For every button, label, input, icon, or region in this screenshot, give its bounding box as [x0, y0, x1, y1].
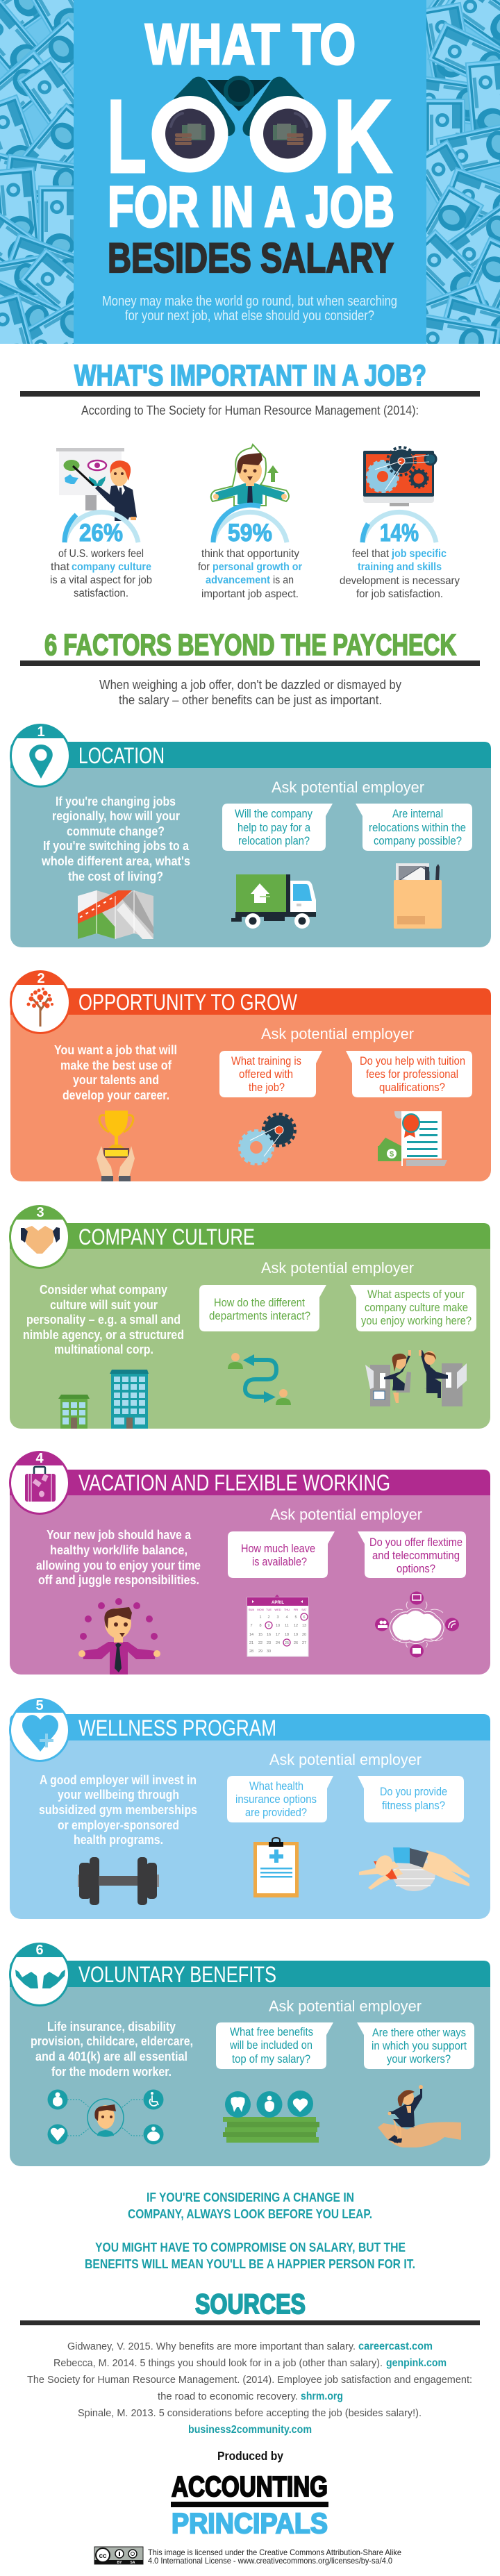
description: subsidized gym memberships: [39, 1803, 197, 1817]
factors intro: the salary – other benefits can be just as important.: [119, 693, 382, 707]
bubble: question 1: What free benefits: [230, 2025, 313, 2038]
icon: calendar: 17: [276, 1633, 280, 1637]
bubble: question 2: options?: [397, 1562, 435, 1575]
description: Consider what company: [40, 1283, 167, 1297]
title word: look: O: [152, 77, 228, 194]
icon: presenter at board: [56, 448, 137, 521]
badge: 4 suitcase: [9, 1451, 70, 1515]
description: [39, 1773, 197, 1847]
badge: 1 location pin: 1: [37, 724, 45, 740]
money background: [0, 0, 500, 344]
panel: wellness program: [9, 1698, 490, 1919]
logo: accounting principals: PRINCIPALS: [172, 2507, 328, 2539]
panel: vacation and flexible working: [9, 1451, 490, 1675]
creative commons badge: cc: [99, 2552, 107, 2560]
badge: 3 handshake: 3: [36, 1205, 44, 1220]
panel: company culture: [9, 1205, 490, 1429]
icon: calendar: 25: [285, 1641, 289, 1645]
icon: calendar: 3: [276, 1615, 279, 1620]
icon: calendar: TUE: [266, 1608, 272, 1611]
source intro: According to The Society for Human Resource Management (2014):: [81, 404, 419, 417]
title word: look: K: [333, 78, 392, 194]
bubble: question 1: departments interact?: [209, 1309, 310, 1322]
description: your talents and: [73, 1073, 159, 1087]
bubble: question 2: What aspects of your: [367, 1288, 465, 1301]
bubble: question 1: the job?: [249, 1081, 285, 1094]
badge: 1 location pin: [10, 724, 71, 788]
bubble: question 1: [199, 1285, 326, 1331]
closing message: BENEFITS WILL MEAN YOU'LL BE A HAPPIER PERSON FOR IT.: [85, 2257, 415, 2271]
sources list: Rebecca, M. 2014. 5 things you should look for in a job (other than salary).: [53, 2357, 383, 2369]
description: off and juggle responsibilities.: [38, 1573, 199, 1587]
sources list: [27, 2341, 472, 2436]
icon: calendar: 23: [267, 1641, 271, 1645]
panel title: WELLNESS PROGRAM: [78, 1715, 276, 1740]
stat text: [50, 548, 152, 599]
stat text: is an: [273, 574, 294, 586]
panel title: COMPANY CULTURE: [78, 1224, 255, 1249]
sources list: the road to economic recovery.: [158, 2391, 298, 2402]
icon: trophy in hands: [97, 1111, 135, 1181]
description: the cost of living?: [68, 870, 163, 883]
ask heading: Ask potential employer: [272, 779, 424, 796]
icon: juggling man: [78, 1598, 160, 1675]
description: develop your career.: [62, 1088, 169, 1102]
description: personality – e.g. a small and: [26, 1313, 181, 1327]
license text: This image is licensed under the Creative Commons Attribution-Share Alike: [148, 2548, 401, 2557]
bubble: question 2: Do you offer flextime: [369, 1536, 462, 1549]
creative commons badge: BY: [117, 2561, 122, 2565]
stat: 59 percent: [198, 444, 302, 600]
bubble: question 2: your workers?: [387, 2052, 451, 2066]
description: provision, childcare, eldercare,: [31, 2034, 193, 2048]
bubble: question 1: relocation plan?: [238, 834, 310, 847]
icon: medical clipboard: [253, 1838, 299, 1897]
bubble: question 2: Do you help with tuition: [360, 1054, 465, 1067]
bubble: question 2: company possible?: [374, 834, 462, 847]
bubble: question 1: [216, 2022, 333, 2069]
stat text: of U.S. workers feel: [58, 548, 144, 560]
icon: monitor with gears: [363, 447, 436, 506]
description: Your new job should have a: [47, 1528, 192, 1542]
badge: 5 heart: [9, 1698, 70, 1762]
gauge: 59 percent: [213, 505, 287, 542]
panel: location: [10, 724, 491, 947]
description: [23, 1283, 184, 1356]
hero banner: [0, 0, 500, 344]
description: [54, 1043, 177, 1102]
bubble: question 1: offered with: [239, 1067, 293, 1081]
number: 26%: 26%: [79, 520, 123, 547]
bubble: question 2: company culture make: [365, 1301, 468, 1314]
ask heading: Ask potential employer: [261, 1025, 414, 1042]
closing message: IF YOU'RE CONSIDERING A CHANGE IN: [147, 2190, 354, 2204]
icon: calendar: 5: [294, 1615, 297, 1620]
bubble: question 1: will be included on: [229, 2038, 312, 2052]
stat text: [340, 548, 460, 600]
bubble: question 2: Are there other ways: [372, 2026, 466, 2039]
bubble: question 1: [227, 1776, 333, 1822]
badge: 2 tree: [10, 970, 71, 1034]
icon: moving truck: [231, 874, 316, 929]
icon: calendar: 1: [259, 1615, 262, 1620]
badge: 6 hands: 6: [35, 1943, 44, 1958]
bubble: question 1: How much leave: [241, 1542, 315, 1555]
bubble: question 1: are provided?: [245, 1806, 307, 1819]
icon: calendar: 8: [259, 1624, 262, 1628]
title line: for in a job: FOR IN A JOB: [108, 174, 394, 239]
icon: calendar: 9: [267, 1624, 270, 1628]
stat text: that: [51, 561, 70, 573]
stat text: is a vital aspect for job: [50, 574, 152, 586]
bubble: question 1: top of my salary?: [232, 2052, 310, 2066]
description: [41, 795, 190, 883]
closing message: YOU MIGHT HAVE TO COMPROMISE ON SALARY, BUT THE: [95, 2240, 406, 2254]
icon: calendar: 13: [302, 1624, 306, 1628]
description: allowing you to enjoy your time: [36, 1559, 201, 1572]
icon: office buildings: [58, 1370, 149, 1429]
icon: calendar: 11: [285, 1624, 289, 1628]
panel title: VACATION AND FLEXIBLE WORKING: [78, 1470, 390, 1495]
ask heading: Ask potential employer: [269, 1751, 422, 1768]
icon: calendar: 27: [302, 1641, 306, 1645]
logo: accounting principals: ACCOUNTING: [172, 2470, 328, 2502]
factors intro: When weighing a job offer, don't be dazzled or dismayed by: [99, 678, 401, 692]
icon: calendar: 28: [249, 1650, 253, 1654]
description: If you're switching jobs to a: [43, 839, 190, 853]
icon: calendar: 22: [258, 1641, 262, 1645]
stat text: satisfaction.: [74, 588, 128, 599]
description: healthy work/life balance,: [50, 1543, 188, 1557]
icon: benefits on money stack: [223, 2091, 319, 2143]
creative commons badge: SA: [131, 2561, 135, 2565]
tagline: for your next job, what else should you consider?: [125, 308, 374, 324]
stat text: company culture: [72, 561, 151, 573]
badge: 6 hands: [9, 1943, 70, 2006]
icon: calendar: 19: [294, 1633, 298, 1637]
bubble: question 2: [357, 2022, 474, 2069]
badge: 4 suitcase: 4: [35, 1451, 44, 1466]
lens: left: [165, 108, 215, 158]
heading: sources: SOURCES: [195, 2289, 306, 2320]
bubble: question 1: [222, 804, 333, 851]
title line: besides salary: BESIDES SALARY: [108, 235, 394, 281]
icon: calendar: SAT: [301, 1608, 307, 1611]
panel: opportunity to grow: [10, 970, 491, 1181]
icon: calendar: 12: [294, 1624, 298, 1628]
bubble: question 2: [346, 1051, 472, 1097]
description: culture will suit your: [50, 1298, 158, 1312]
icon: calendar: [247, 1595, 308, 1656]
tagline: [102, 294, 397, 324]
description: You want a job that will: [54, 1043, 177, 1057]
stat text: development is necessary: [340, 575, 460, 587]
bubble: question 2: [356, 804, 472, 851]
sources list: The Society for Human Resource Management. (2014). Employee job satisfaction and engagement:: [27, 2374, 472, 2386]
bubble: question 1: How do the different: [214, 1296, 305, 1309]
panel title: VOLUNTARY BENEFITS: [78, 1962, 276, 1987]
creative commons badge: [94, 2547, 143, 2565]
panel: voluntary benefits: [9, 1943, 490, 2166]
icon: calendar: 2: [267, 1615, 270, 1620]
stat text: for: [198, 561, 210, 573]
bubble: question 2: and telecommuting: [372, 1549, 460, 1562]
number: 59%: 59%: [228, 520, 272, 547]
description: regionally, how will your: [52, 809, 180, 823]
bubble: question 1: insurance options: [235, 1793, 317, 1806]
binoculars: [174, 76, 304, 136]
icon: calendar: SUN: [249, 1608, 254, 1611]
sources list: business2community.com: [188, 2424, 312, 2436]
closing message: [85, 2190, 415, 2271]
license text: [148, 2548, 401, 2566]
icon: calendar: 30: [267, 1650, 271, 1654]
ask heading: Ask potential employer: [261, 1259, 414, 1277]
bubble: question 2: relocations within the: [369, 821, 466, 834]
icon: calendar: 18: [285, 1633, 289, 1637]
title line: what to: WHAT TO: [145, 12, 356, 76]
icon: gears: [240, 1114, 295, 1164]
description: or employer-sponsored: [58, 1818, 179, 1832]
icon: woman on exercise ball: [359, 1847, 469, 1891]
icon: calendar: 14: [249, 1633, 253, 1637]
description: multinational corp.: [54, 1343, 153, 1356]
description: for the modern worker.: [51, 2065, 172, 2079]
bubble: question 2: fees for professional: [366, 1067, 458, 1081]
icon: dumbbell: [78, 1857, 159, 1905]
factors intro: [99, 678, 401, 707]
icon: two way communication arrows: [228, 1353, 291, 1405]
stat text: advancement: [206, 574, 270, 586]
icon: diploma and money: [378, 1111, 447, 1166]
description: If you're changing jobs: [56, 795, 176, 808]
sources list: genpink.com: [386, 2357, 447, 2369]
icon: calendar: 10: [276, 1624, 280, 1628]
description: and a 401(k) are all essential: [35, 2050, 188, 2063]
icon: calendar: 6: [303, 1615, 306, 1620]
stat text: important job aspect.: [201, 588, 299, 600]
description: [31, 2020, 193, 2079]
icon: map: [78, 890, 153, 939]
lens: right: [263, 108, 312, 158]
icon: calendar: 20: [302, 1633, 306, 1637]
icon: calendar: WED: [274, 1608, 281, 1611]
bubble: question 2: you enjoy working here?: [361, 1314, 472, 1327]
gauge: 26 percent: [65, 512, 138, 542]
icon: calendar: 29: [258, 1650, 262, 1654]
bubble: question 2: [358, 1776, 464, 1822]
sources list: Gidwaney, V. 2015. Why benefits are more important than salary.: [67, 2341, 356, 2352]
icon: calendar: MON: [257, 1608, 264, 1611]
badge: 2 tree: 2: [37, 971, 45, 986]
title word: look: L: [107, 78, 147, 194]
bubble: question 1: [228, 1531, 335, 1578]
license text: 4.0 International License - www.creativecommons.org/licenses/by-sa/4.0: [148, 2556, 392, 2566]
bubble: question 1: is available?: [252, 1555, 307, 1568]
badge: 3 handshake: [9, 1205, 70, 1269]
stat text: think that opportunity: [201, 548, 299, 560]
sources list: shrm.org: [301, 2391, 343, 2402]
bubble: question 2: [350, 1285, 476, 1331]
title word: look: [107, 77, 392, 194]
icon: calendar: 7: [250, 1624, 253, 1628]
centre panel: [74, 0, 426, 344]
icon: calendar: 4: [285, 1615, 288, 1620]
icon: cloud network: [375, 1592, 459, 1657]
icon: calendar: APRIL: [272, 1601, 284, 1605]
description: make the best use of: [60, 1058, 172, 1072]
icon: growing employee: [211, 444, 289, 506]
tagline: Money may make the world go round, but when searching: [102, 294, 397, 309]
produced by: Produced by: [217, 2449, 283, 2463]
panel title: LOCATION: [78, 743, 165, 768]
icon: calendar: 16: [267, 1633, 271, 1637]
stat text: training and skills: [358, 561, 442, 573]
closing message: COMPANY, ALWAYS LOOK BEFORE YOU LEAP.: [128, 2207, 372, 2221]
bubble: question 2: [358, 1531, 466, 1578]
bubble: question 1: Will the company: [235, 807, 312, 820]
description: Life insurance, disability: [47, 2020, 176, 2034]
icon: calendar: 26: [294, 1641, 298, 1645]
bubble: question 1: What health: [249, 1779, 303, 1793]
gauge: 14 percent: [362, 512, 436, 542]
ask heading: Ask potential employer: [269, 1997, 422, 2015]
number: 14%: 14%: [380, 520, 419, 547]
stat text: job specific: [391, 548, 447, 560]
icon: calendar: 15: [258, 1633, 262, 1637]
bubble: question 2: in which you support: [372, 2039, 467, 2052]
stat: 26 percent: [50, 448, 152, 599]
bubble: question 1: [219, 1051, 322, 1097]
stat text: feel that: [352, 548, 390, 560]
description: health programs.: [74, 1833, 163, 1847]
description: nimble agency, or a structured: [23, 1328, 184, 1342]
description: whole different area, what's: [41, 854, 190, 868]
bubble: question 2: fitness plans?: [382, 1799, 445, 1812]
stat text: [198, 548, 302, 600]
title word: look: O: [250, 77, 326, 194]
icon: diploma and money: $: [390, 1150, 394, 1158]
bubble: question 2: Are internal: [392, 807, 443, 820]
bubble: question 2: Do you provide: [380, 1785, 447, 1798]
icon: calendar: FRI: [294, 1608, 298, 1611]
icon: calendar: THU: [284, 1608, 290, 1611]
panel title: OPPORTUNITY TO GROW: [78, 990, 298, 1015]
sources list: careercast.com: [358, 2341, 433, 2352]
sources list: Spinale, M. 2013. 5 considerations before accepting the job (besides salary!).: [78, 2407, 422, 2419]
icon: benefits network: [47, 2089, 164, 2145]
icon: calendar: 24: [276, 1641, 280, 1645]
description: A good employer will invest in: [40, 1773, 197, 1787]
icon: office workers: [365, 1350, 467, 1406]
stat: 14 percent: [340, 447, 460, 600]
icon: calendar: 21: [249, 1641, 253, 1645]
description: [36, 1528, 201, 1587]
description: commute change?: [67, 824, 165, 838]
stat text: for job satisfaction.: [356, 588, 443, 600]
icon: folder with documents: [394, 863, 442, 929]
icon: woman on a giant hand: [378, 2085, 461, 2147]
ask heading: Ask potential employer: [270, 1506, 422, 1523]
bubble: question 1: help to pay for a: [238, 821, 310, 834]
stat text: personal growth or: [212, 561, 302, 573]
bubble: question 1: What training is: [231, 1054, 301, 1067]
badge: 5 heart: 5: [35, 1698, 44, 1713]
bubble: question 2: qualifications?: [379, 1081, 445, 1094]
description: your wellbeing through: [58, 1788, 179, 1802]
logo: accounting principals: [171, 2470, 328, 2539]
